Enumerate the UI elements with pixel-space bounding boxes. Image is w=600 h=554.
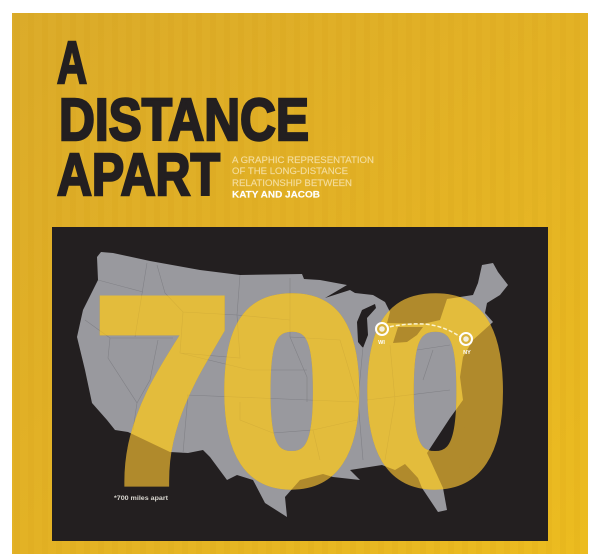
subtitle: RELATIONSHIP BETWEEN xyxy=(232,178,352,189)
big number 700: 7 xyxy=(94,244,231,537)
marker: WI xyxy=(376,323,388,346)
route between markers xyxy=(384,324,462,338)
subtitle: A GRAPHIC REPRESENTATION xyxy=(232,155,374,166)
marker: WI: WI xyxy=(378,340,385,346)
title: DISTANCE xyxy=(59,87,309,153)
title: APART xyxy=(57,142,220,208)
state borders xyxy=(85,263,450,460)
title xyxy=(57,30,309,208)
subtitle xyxy=(232,155,374,200)
black map panel xyxy=(52,227,548,541)
title: A xyxy=(57,30,87,96)
map seen through the number xyxy=(100,293,490,490)
big number 700: 0 xyxy=(362,244,509,538)
marker: NY: NY xyxy=(463,350,471,356)
subtitle: KATY AND JACOB xyxy=(232,190,320,200)
subtitle: OF THE LONG-DISTANCE xyxy=(232,166,348,177)
footnote: *700 miles apart xyxy=(114,495,169,502)
big number 700: 0 xyxy=(219,244,365,538)
big number 700 xyxy=(94,244,509,538)
marker: NY xyxy=(460,333,472,356)
US map xyxy=(77,252,508,517)
